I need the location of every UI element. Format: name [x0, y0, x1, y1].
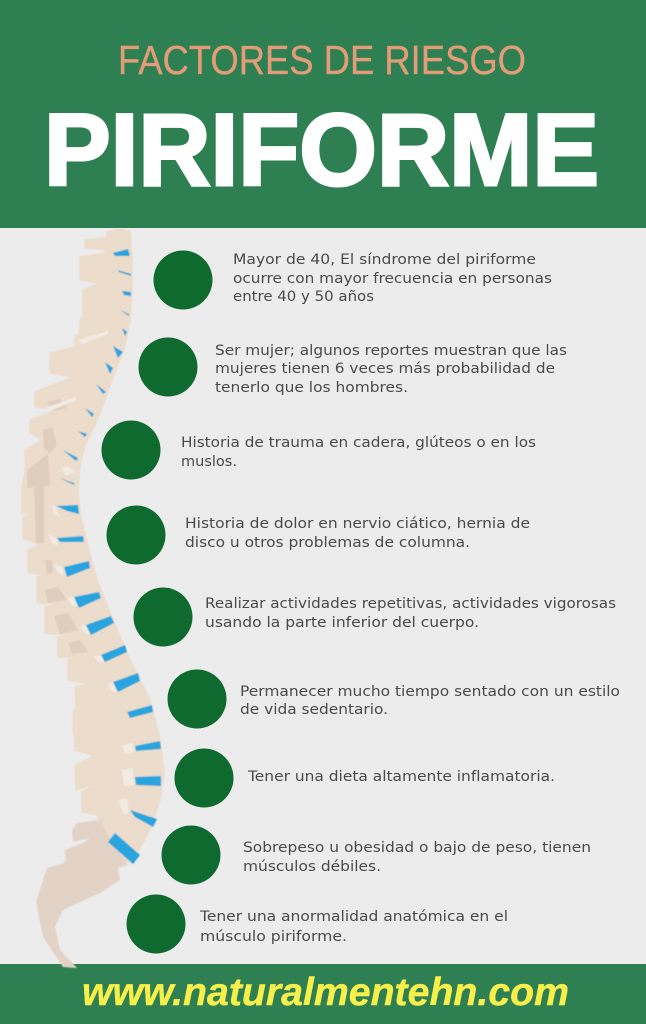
blue intervertebral discs — [56, 249, 161, 864]
risk factor 2: tenerlo que los hombres. — [215, 380, 408, 396]
risk factor 1: entre 40 y 50 años — [233, 289, 374, 305]
risk factor 9 — [126, 894, 508, 954]
risk factor 2 — [138, 338, 567, 396]
spine illustration — [22, 229, 164, 968]
risk factor 7: Tener una dieta altamente inflamatoria. — [247, 769, 555, 785]
darker vertebra shading — [27, 399, 88, 654]
risk factor 3: muslos. — [181, 454, 237, 470]
footer band — [0, 964, 646, 1024]
header band — [0, 0, 646, 228]
spine bones — [22, 229, 164, 862]
risk factor 2: Ser mujer; algunos reportes muestran que las — [215, 343, 567, 359]
risk factor 5 — [134, 588, 616, 646]
risk factor 1 — [154, 250, 552, 310]
risk factor 9: Tener una anormalidad anatómica en el — [199, 909, 508, 925]
risk factor 6 — [168, 670, 620, 728]
risk factor 4: disco u otros problemas de columna. — [185, 535, 470, 551]
risk factor 8: Sobrepeso u obesidad o bajo de peso, tienen — [243, 840, 591, 856]
risk factor 2: mujeres tienen 6 veces más probabilidad de — [215, 361, 555, 377]
risk factor 6: de vida sedentario. — [240, 702, 388, 718]
risk factor 3: Historia de trauma en cadera, glúteos o en los — [181, 435, 536, 451]
risk factor 1: Mayor de 40, El síndrome del piriforme — [233, 252, 536, 268]
risk factor 4 — [106, 506, 530, 564]
risk factor 8 — [162, 826, 591, 884]
risk factor 9: músculo piriforme. — [200, 929, 347, 945]
risk factor 3 — [102, 420, 536, 480]
risk factor 5: Realizar actividades repetitivas, actividades vigorosas — [205, 596, 616, 612]
risk factor 7 — [174, 748, 555, 808]
risk factor 4: Historia de dolor en nervio ciático, hernia de — [185, 516, 530, 532]
risk factor 8: músculos débiles. — [243, 859, 381, 875]
sacrum and coccyx — [36, 820, 128, 968]
title: PIRIFORME — [44, 93, 599, 207]
website url: www.naturalmentehn.com — [82, 971, 569, 1014]
risk factor 1: ocurre con mayor frecuencia en personas — [233, 271, 552, 287]
risk factor 5: usando la parte inferior del cuerpo. — [205, 615, 479, 631]
subtitle: FACTORES DE RIESGO — [118, 37, 526, 83]
risk factor 6: Permanecer mucho tiempo sentado con un estilo — [240, 684, 620, 700]
light gaps between vertebrae — [45, 331, 134, 815]
